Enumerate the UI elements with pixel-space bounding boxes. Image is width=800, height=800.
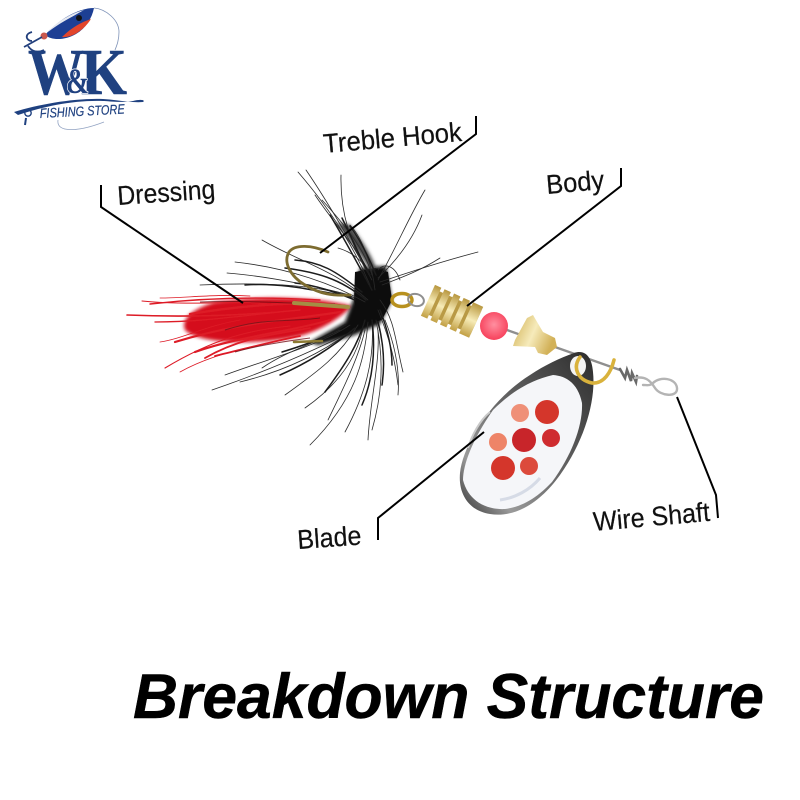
logo: W&K Fishing Store xyxy=(14,8,144,130)
logo: W&K Fishing Store: K xyxy=(81,36,127,109)
callout: Body xyxy=(467,165,621,306)
eyelet rings xyxy=(392,292,425,308)
callout: Blade: Blade xyxy=(296,521,362,555)
callout: Treble Hook xyxy=(320,116,476,253)
callout: Dressing: Dressing xyxy=(116,174,216,211)
callout: Body: Body xyxy=(545,165,606,200)
brass bell bearing xyxy=(513,315,557,355)
pink bead xyxy=(480,312,508,340)
logo: W&K Fishing Store: FISHING STORE xyxy=(39,102,126,121)
red tail feather xyxy=(127,295,352,372)
logo: W&K Fishing Store: W xyxy=(28,36,84,109)
lure body: brass barrel xyxy=(421,285,483,338)
clevis xyxy=(576,357,614,383)
callout: Treble Hook: Treble Hook xyxy=(322,117,463,159)
title: Breakdown Structure xyxy=(133,662,764,732)
lure: dressing feathers xyxy=(127,170,478,445)
callout: Wire Shaft: Wire Shaft xyxy=(592,497,712,537)
blade red dots xyxy=(489,400,560,480)
treble hook xyxy=(287,246,350,342)
blade xyxy=(460,352,593,515)
wire shaft xyxy=(507,330,677,395)
callout: Wire Shaft xyxy=(592,397,718,537)
logo: W&K Fishing Store: & xyxy=(66,61,89,101)
callout: Blade xyxy=(296,432,484,555)
black hackle fibres xyxy=(200,170,478,445)
callout: Dressing xyxy=(101,174,243,303)
